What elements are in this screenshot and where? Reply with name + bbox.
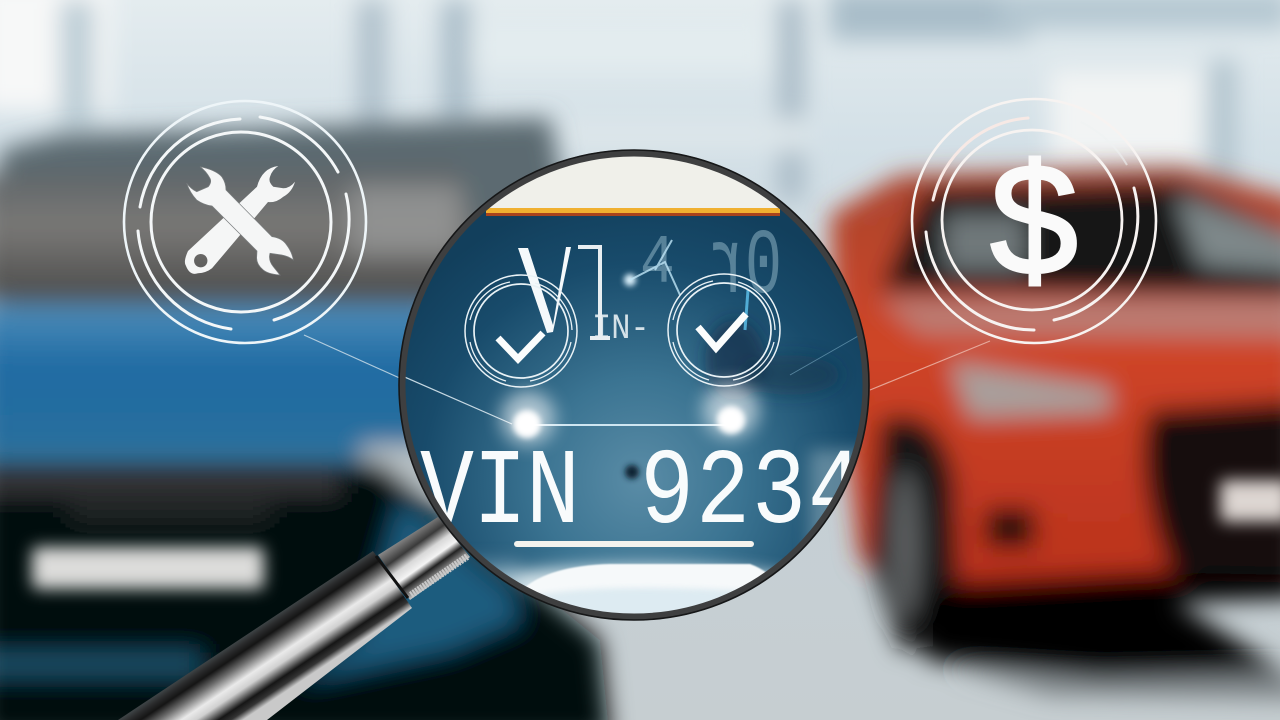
magnifying glass handle	[118, 517, 470, 720]
lens: ghost characters: 0r	[708, 214, 782, 320]
outer grip	[118, 551, 412, 720]
lens: large V1 characters	[518, 247, 610, 338]
lens: right glow	[703, 382, 759, 438]
dollar sign: $	[990, 132, 1078, 308]
lens: blue sparkle	[624, 240, 748, 330]
magnifying glass lens	[400, 150, 870, 640]
connector line: dollar to lens	[870, 341, 990, 390]
connector line: wrench to lens	[304, 335, 404, 380]
wrench with two open ends	[187, 167, 293, 275]
lens: top white band	[490, 156, 778, 208]
magnifying glass rim	[399, 150, 869, 620]
lens: bottom highlight	[526, 563, 766, 614]
lens: left check ring	[465, 275, 577, 387]
lens: orange stripe	[486, 208, 780, 213]
lens: ghost characters	[642, 230, 778, 293]
lens: connector line between glows	[400, 335, 860, 425]
lens: right check ring	[668, 274, 780, 386]
lens: soft glows and shadows	[479, 314, 855, 587]
lens: small IN text: IN-	[592, 310, 650, 350]
lens: number characters: 9234	[640, 432, 862, 555]
lens: dark spot	[625, 465, 639, 479]
wrench with ring end	[185, 166, 295, 274]
lens: VIN characters: VIN	[420, 432, 580, 555]
red car, blurred	[830, 168, 1280, 700]
metal collar	[378, 517, 470, 600]
lens: left glow	[501, 391, 555, 445]
lens: underline	[514, 541, 754, 547]
icon: dollar in concentric rings	[912, 99, 1156, 343]
blue car number plate	[32, 547, 264, 589]
lens: ghost characters: 4	[640, 226, 675, 304]
icon: wrenches in concentric rings	[124, 101, 366, 343]
blue car, blurred	[0, 118, 610, 720]
red car number plate	[1220, 480, 1280, 522]
